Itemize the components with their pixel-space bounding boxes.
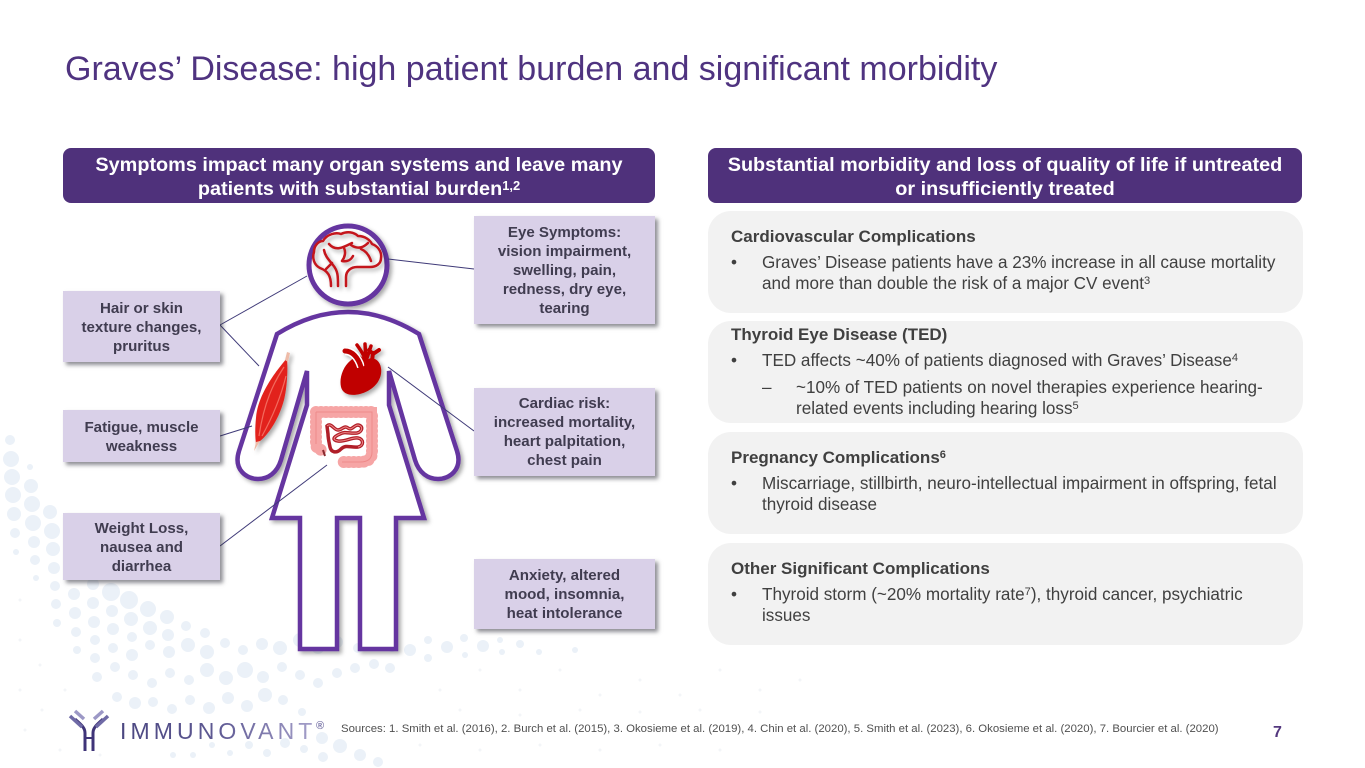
label: anxiety: Anxiety, altered xyxy=(509,567,620,584)
card: cardiovascular xyxy=(708,211,1303,313)
card: cardiovascular: Graves’ Disease patients have a 23% increase in all cause mortality xyxy=(762,253,1275,272)
card: cardiovascular: and more than double the risk of a major CV event3 xyxy=(762,274,1150,293)
label: eye symptoms: redness, dry eye, xyxy=(503,281,626,298)
icon: heart xyxy=(340,344,381,395)
title: Graves’ Disease: high patient burden and significant morbidity xyxy=(65,50,997,88)
label: weight loss: diarrhea xyxy=(112,558,171,575)
label: anxiety xyxy=(474,559,655,629)
card: pregnancy: • xyxy=(731,474,737,493)
card: pregnancy: Miscarriage, stillbirth, neuro-intellectual impairment in offspring, fetal xyxy=(762,474,1277,493)
label: eye symptoms: tearing xyxy=(539,300,590,317)
label: hair or skin: pruritus xyxy=(113,338,170,355)
label: cardiac risk: increased mortality, xyxy=(494,414,635,431)
page number: 7 xyxy=(1273,724,1282,741)
label: cardiac risk: heart palpitation, xyxy=(504,433,625,450)
icon: muscle xyxy=(254,352,290,451)
label: cardiac risk: Cardiac risk: xyxy=(519,395,610,412)
label: hair or skin: texture changes, xyxy=(82,319,201,336)
card: cardiovascular: • xyxy=(731,253,737,272)
card: thyroid eye disease: – xyxy=(762,378,772,397)
label: fatigue xyxy=(63,410,220,462)
logo xyxy=(68,710,324,751)
icon: intestines xyxy=(316,412,372,462)
card: pregnancy: thyroid disease xyxy=(762,495,877,514)
label: cardiac risk xyxy=(474,388,655,476)
body outline xyxy=(238,312,458,649)
icon: brain circle xyxy=(309,226,387,304)
label: hair or skin xyxy=(63,291,220,362)
label: hair or skin: Hair or skin xyxy=(100,300,183,317)
panel header: morbidity: Substantial morbidity and loss of quality of life if untreated xyxy=(728,154,1282,176)
label: eye symptoms: Eye Symptoms: xyxy=(508,224,621,241)
label: fatigue: Fatigue, muscle xyxy=(84,419,199,436)
logo mark xyxy=(70,711,108,751)
card: other: issues xyxy=(762,606,810,625)
card: thyroid eye disease: TED affects ~40% of patients diagnosed with Graves’ Disease4 xyxy=(762,351,1238,370)
card: thyroid eye disease: Thyroid Eye Disease (TED) xyxy=(731,325,947,344)
label: eye symptoms: vision impairment, xyxy=(498,243,631,260)
panel header: symptoms: patients with substantial burden1,2 xyxy=(198,178,520,200)
label: weight loss: Weight Loss, xyxy=(95,520,188,537)
label: eye symptoms xyxy=(474,216,655,324)
card: thyroid eye disease: related events including hearing loss5 xyxy=(796,399,1079,418)
card: pregnancy xyxy=(708,432,1303,534)
label: weight loss xyxy=(63,513,220,580)
label: anxiety: mood, insomnia, xyxy=(505,586,624,603)
label: cardiac risk: chest pain xyxy=(527,452,602,469)
connector lines xyxy=(220,259,474,546)
label: weight loss: nausea and xyxy=(100,539,183,556)
label: anxiety: heat intolerance xyxy=(507,605,622,622)
label: eye symptoms: swelling, pain, xyxy=(513,262,616,279)
sources: Sources: 1. Smith et al. (2016), 2. Burch et al. (2015), 3. Okosieme et al. (2019), 4. Chin et al. (2020), 5. Smith et al. (2023), 6. Okosieme et al. (2020), 7. Bourcier et al. (2020) xyxy=(341,723,1219,735)
panel header: symptoms xyxy=(63,148,655,203)
card: pregnancy: Pregnancy Complications6 xyxy=(731,448,946,467)
card: cardiovascular: Cardiovascular Complications xyxy=(731,227,976,246)
card: other: • xyxy=(731,585,737,604)
card: thyroid eye disease xyxy=(708,321,1303,423)
card: other: Other Significant Complications xyxy=(731,559,990,578)
panel header: symptoms: Symptoms impact many organ systems and leave many xyxy=(95,154,623,176)
logo wordmark: IMMUNOVANT xyxy=(120,718,316,744)
body diagram xyxy=(220,224,474,656)
panel header: morbidity xyxy=(708,148,1302,203)
registered mark: ® xyxy=(316,720,324,732)
card: other: Thyroid storm (~20% mortality rate7), thyroid cancer, psychiatric xyxy=(762,585,1243,604)
panel header: morbidity: or insufficiently treated xyxy=(895,178,1115,200)
card: thyroid eye disease: • xyxy=(731,351,737,370)
card: thyroid eye disease: ~10% of TED patients on novel therapies experience hearing- xyxy=(796,378,1263,397)
label: fatigue: weakness xyxy=(106,438,177,455)
card: other xyxy=(708,543,1303,645)
